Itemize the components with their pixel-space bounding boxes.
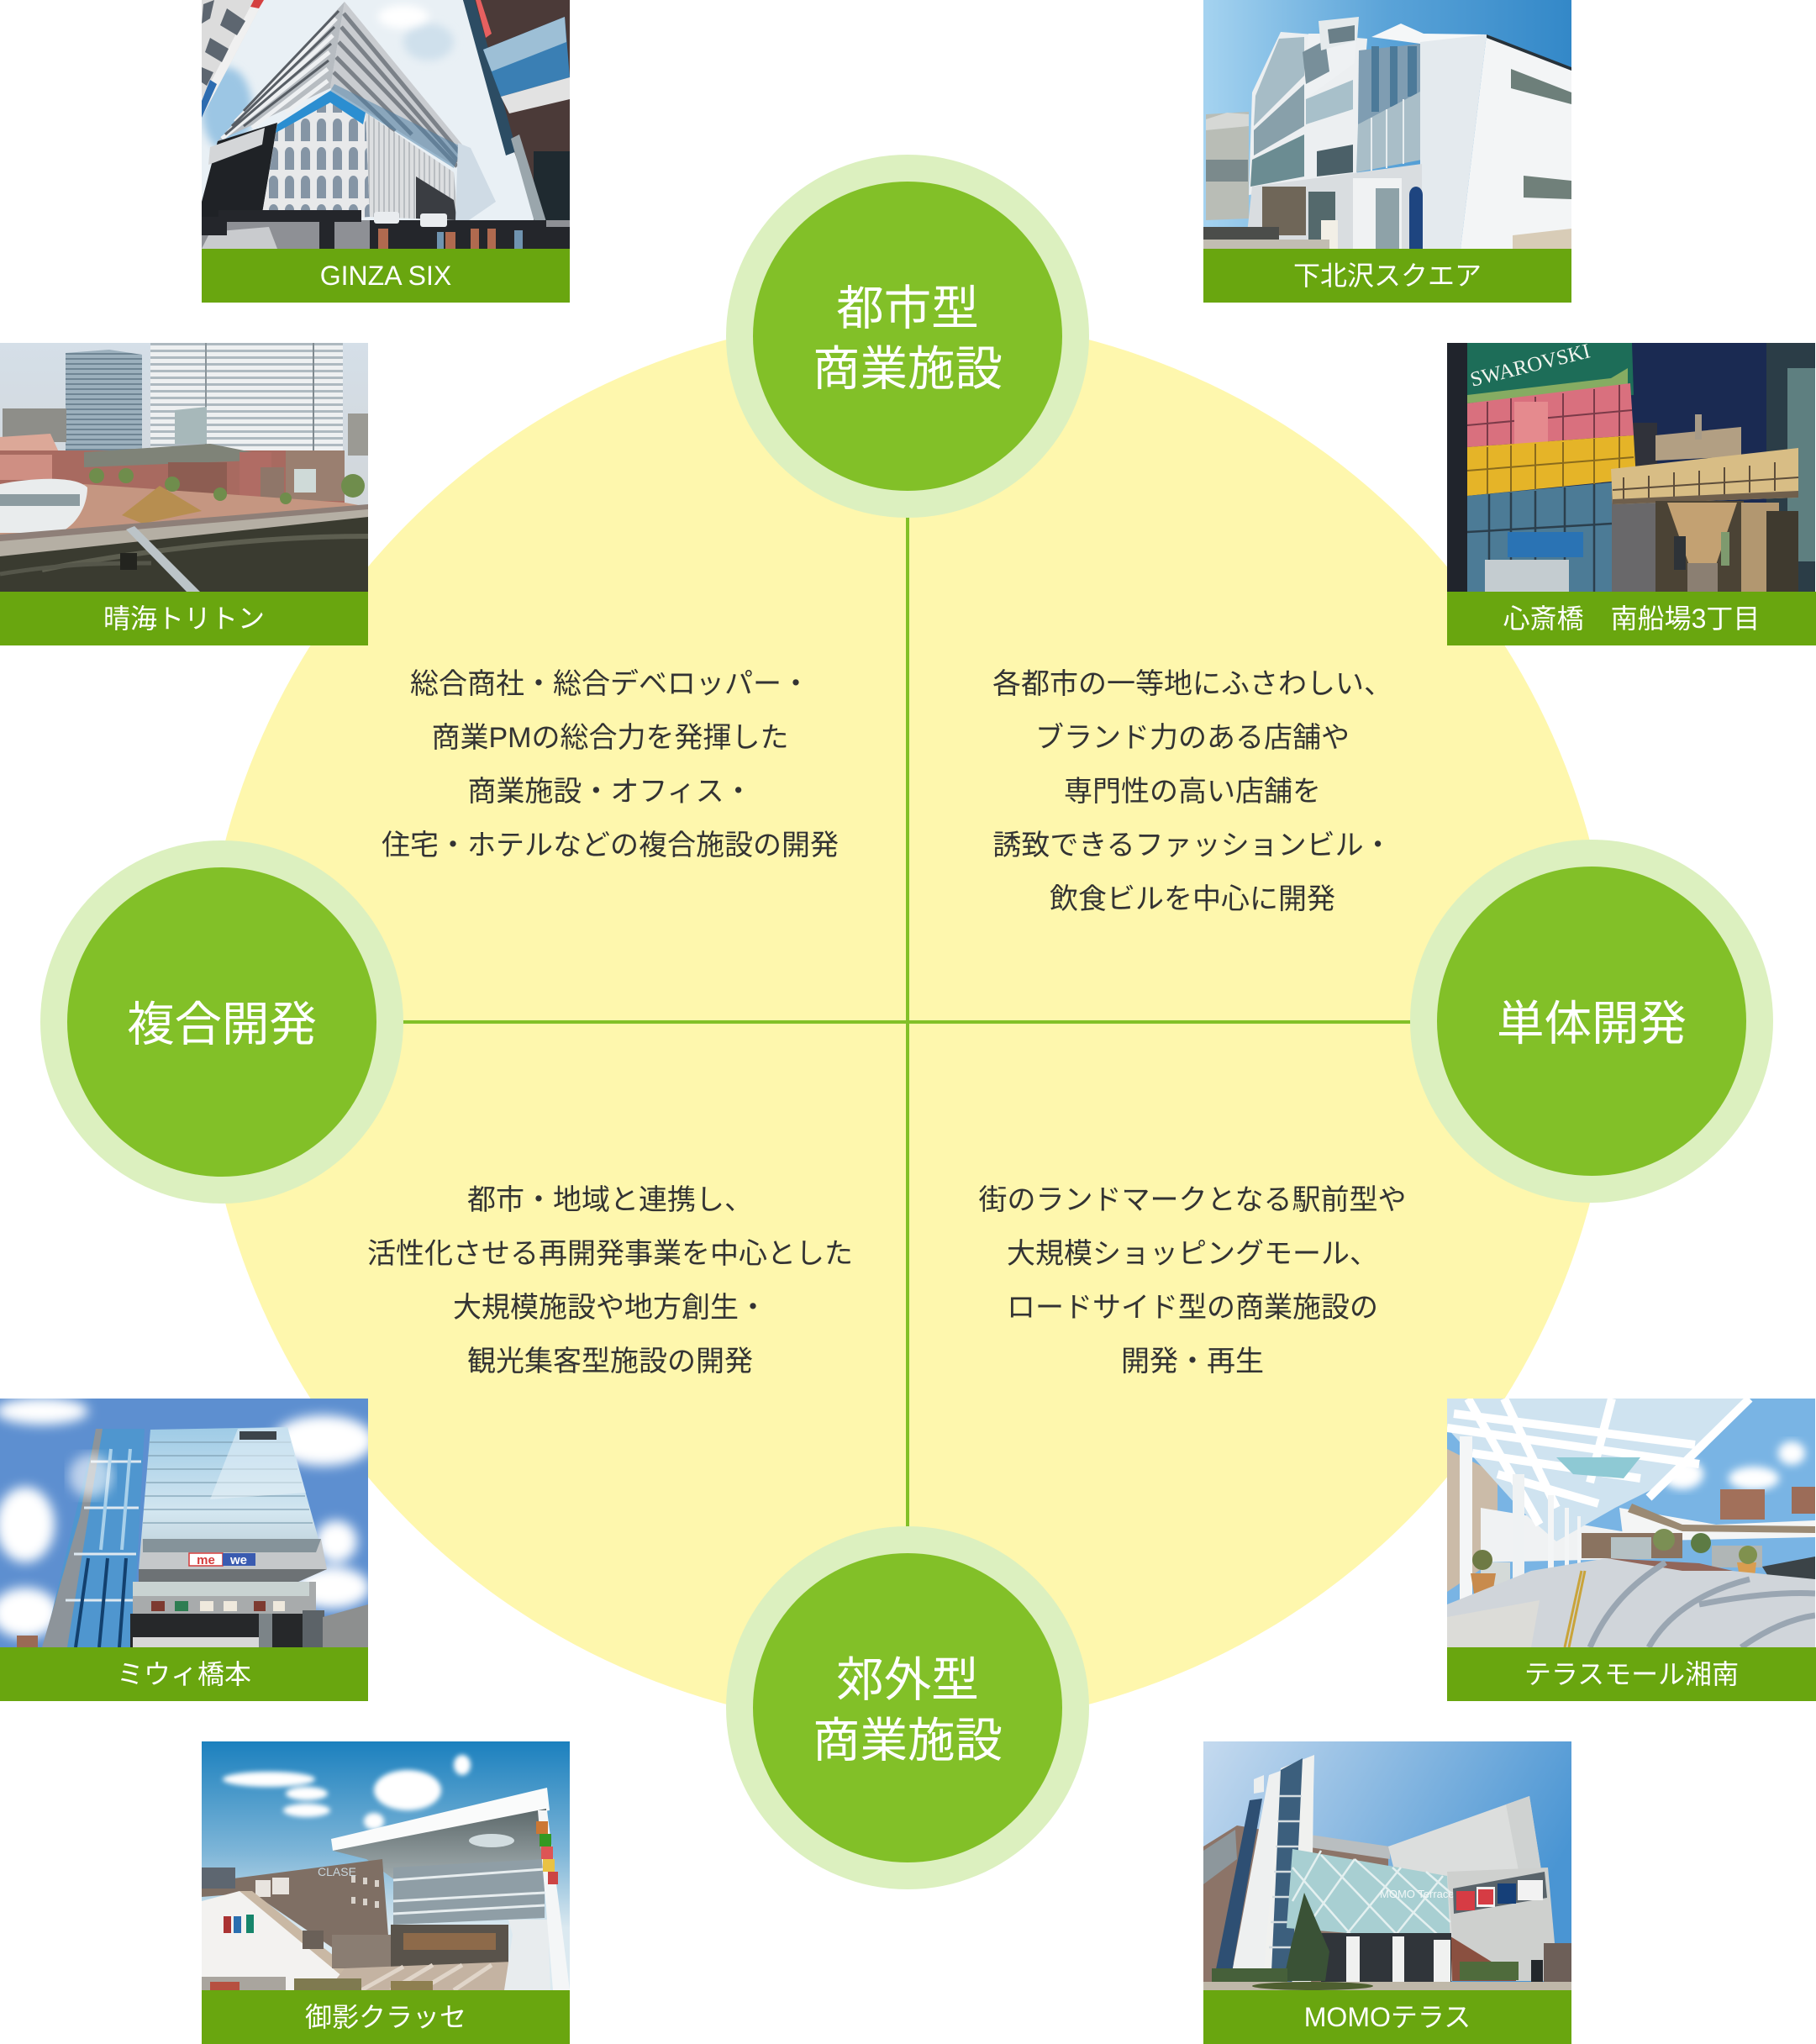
text: lower left quadrant: 活性化させる再開発事業を中心とした — [367, 1238, 853, 1270]
text: upper left quadrant — [382, 668, 839, 861]
caption: 下北沢スクエア — [1293, 261, 1482, 291]
caption: 晴海トリトン — [103, 603, 265, 634]
photo: Mewe Hashimoto: we — [229, 1553, 247, 1567]
photo: Mewe Hashimoto — [0, 1399, 368, 1647]
yellow background circle — [202, 316, 1613, 1728]
horizontal axis line — [395, 1020, 1420, 1024]
caption — [1447, 1647, 1816, 1701]
node: suburban commercial — [726, 1526, 1089, 1889]
text: lower right quadrant: 大規模ショッピングモール、 — [1007, 1238, 1378, 1270]
text: lower right quadrant: 開発・再生 — [1121, 1346, 1264, 1378]
caption — [0, 592, 368, 645]
photo tile: Mewe Hashimoto — [0, 1399, 368, 1701]
node: single development: 単体開発 — [1497, 997, 1687, 1050]
photo: Mewe Hashimoto: me — [197, 1553, 215, 1567]
caption — [1203, 249, 1571, 303]
caption: ミウィ橋本 — [117, 1659, 251, 1689]
text: upper right quadrant: ブランド力のある店舗や — [1035, 722, 1350, 754]
caption — [1203, 1990, 1571, 2044]
caption: 心斎橋 南船場3丁目 — [1503, 603, 1760, 634]
text: upper left quadrant: 総合商社・総合デベロッパー・ — [410, 668, 810, 700]
caption — [0, 1647, 368, 1701]
photo: Mikage Classe: CLASE — [318, 1865, 356, 1878]
text: lower right quadrant: 街のランドマークとなる駅前型や — [978, 1184, 1406, 1216]
caption: 御影クラッセ — [305, 2002, 466, 2032]
node: suburban commercial: 郊外型 — [836, 1653, 979, 1706]
text: upper left quadrant: 住宅・ホテルなどの複合施設の開発 — [382, 830, 839, 861]
text: upper left quadrant: 商業PMの総合力を発揮した — [432, 722, 788, 754]
node: suburban commercial: 商業施設 — [813, 1714, 1003, 1767]
text: lower right quadrant — [978, 1184, 1406, 1378]
text: upper right quadrant — [992, 668, 1392, 915]
photo tile: GINZA SIX — [202, 0, 570, 303]
photo tile: Shinsaibashi Minamisenba 3-chome — [1447, 343, 1816, 645]
node: urban commercial — [726, 155, 1089, 518]
caption: MOMOテラス — [1304, 2002, 1471, 2032]
caption — [202, 1990, 570, 2044]
node: complex development: 複合開発 — [127, 998, 317, 1051]
text: upper left quadrant: 商業施設・オフィス・ — [467, 776, 753, 808]
text: upper right quadrant: 各都市の一等地にふさわしい、 — [992, 668, 1392, 700]
node: single development — [1410, 840, 1773, 1203]
photo: Terrace Mall Shonan — [1447, 1399, 1815, 1647]
vertical axis line — [906, 504, 909, 1546]
photo: GINZA SIX building — [202, 0, 570, 249]
node: urban commercial: 都市型 — [836, 282, 979, 335]
text: lower left quadrant — [367, 1184, 853, 1378]
caption — [202, 249, 570, 303]
text: lower right quadrant: ロードサイド型の商業施設の — [1007, 1292, 1378, 1324]
text: upper right quadrant: 専門性の高い店舗を — [1064, 776, 1321, 808]
photo tile: Terrace Mall Shonan — [1447, 1399, 1816, 1701]
caption: テラスモール湘南 — [1524, 1659, 1739, 1689]
photo: Harumi Triton — [0, 343, 368, 592]
photo: MOMO Terrace — [1203, 1741, 1571, 1990]
caption: GINZA SIX — [320, 261, 451, 291]
photo: Shinsaibashi night scene — [1447, 343, 1815, 592]
photo tile: Mikage Classe — [202, 1741, 570, 2044]
node: urban commercial: 商業施設 — [813, 342, 1003, 395]
text: upper right quadrant: 誘致できるファッションビル・ — [992, 830, 1392, 861]
photo tile: Harumi Triton — [0, 343, 368, 645]
text: lower left quadrant: 観光集客型施設の開発 — [467, 1346, 753, 1378]
node: complex development — [40, 840, 403, 1204]
photo tile: Shimokitazawa Square — [1203, 0, 1571, 303]
photo: Shimokitazawa Square building — [1203, 0, 1571, 249]
text: lower left quadrant: 大規模施設や地方創生・ — [453, 1292, 767, 1324]
text: upper right quadrant: 飲食ビルを中心に開発 — [1050, 883, 1335, 915]
photo: MOMO Terrace: MOMO Terrace — [1380, 1888, 1455, 1900]
photo tile: MOMO Terrace — [1203, 1741, 1571, 2044]
text: lower left quadrant: 都市・地域と連携し、 — [467, 1184, 753, 1216]
photo: Mikage Classe — [202, 1741, 570, 1990]
caption — [1447, 592, 1816, 645]
